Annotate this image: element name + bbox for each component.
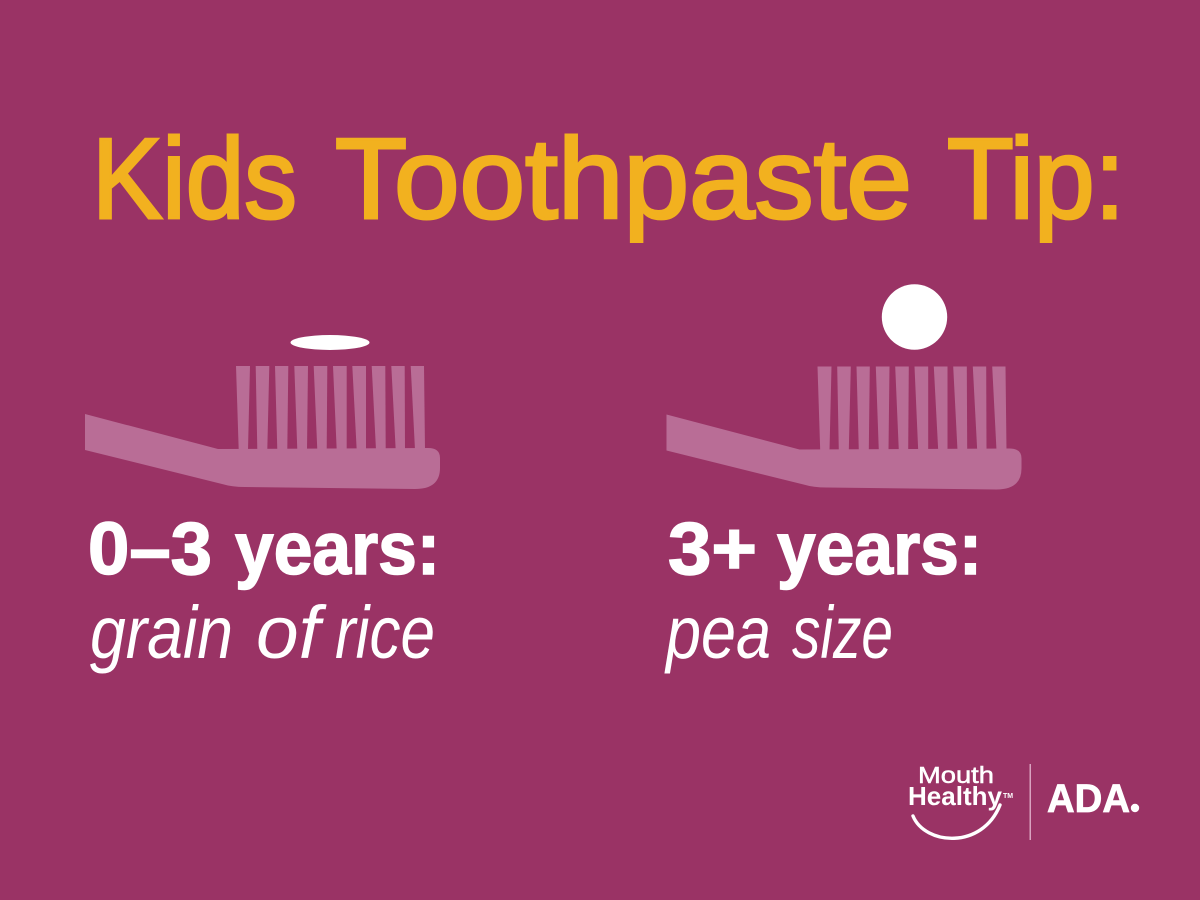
label: grain of rice: of: [256, 591, 327, 674]
label: grain of rice: [90, 591, 435, 674]
label: grain of rice: rice: [335, 591, 435, 674]
title: Kids: [92, 116, 297, 243]
label: 3+ years: 3+: [668, 507, 757, 590]
title: Toothpaste: [335, 116, 912, 243]
divider: [1030, 764, 1031, 840]
title: [92, 116, 1125, 243]
label: pea size: pea: [664, 591, 771, 674]
logo: MouthHealthy and ADA: [908, 762, 1139, 840]
logo text: Healthy: Healthy: [908, 781, 1003, 811]
label: 3+ years: [668, 507, 982, 590]
label: 3+ years: years:: [777, 507, 982, 590]
icon: toothbrush, 0-3 years: [85, 366, 440, 489]
logo text: ADA: ADA: [1047, 777, 1130, 821]
label: 0-3 years: 0–3: [88, 507, 212, 590]
title: Tip:: [947, 116, 1125, 243]
logo text: trademark: TM: [1003, 793, 1013, 800]
icon: pea size toothpaste: [882, 284, 947, 350]
logo mark: registered: [1131, 804, 1139, 812]
icon: smile arc: [913, 805, 1000, 838]
icon: grain of rice toothpaste: [290, 335, 370, 350]
label: pea size: [664, 591, 893, 674]
label: 0-3 years: years:: [235, 507, 440, 590]
logo text: Mouth: Mouth: [918, 762, 994, 788]
label: 0-3 years: [88, 507, 440, 590]
icon: toothbrush, 3+ years: [666, 366, 1022, 490]
panel: 0-3 years: [85, 335, 440, 674]
label: grain of rice: grain: [90, 591, 233, 674]
panel: 3+ years: [664, 284, 1022, 674]
label: pea size: size: [792, 591, 893, 674]
